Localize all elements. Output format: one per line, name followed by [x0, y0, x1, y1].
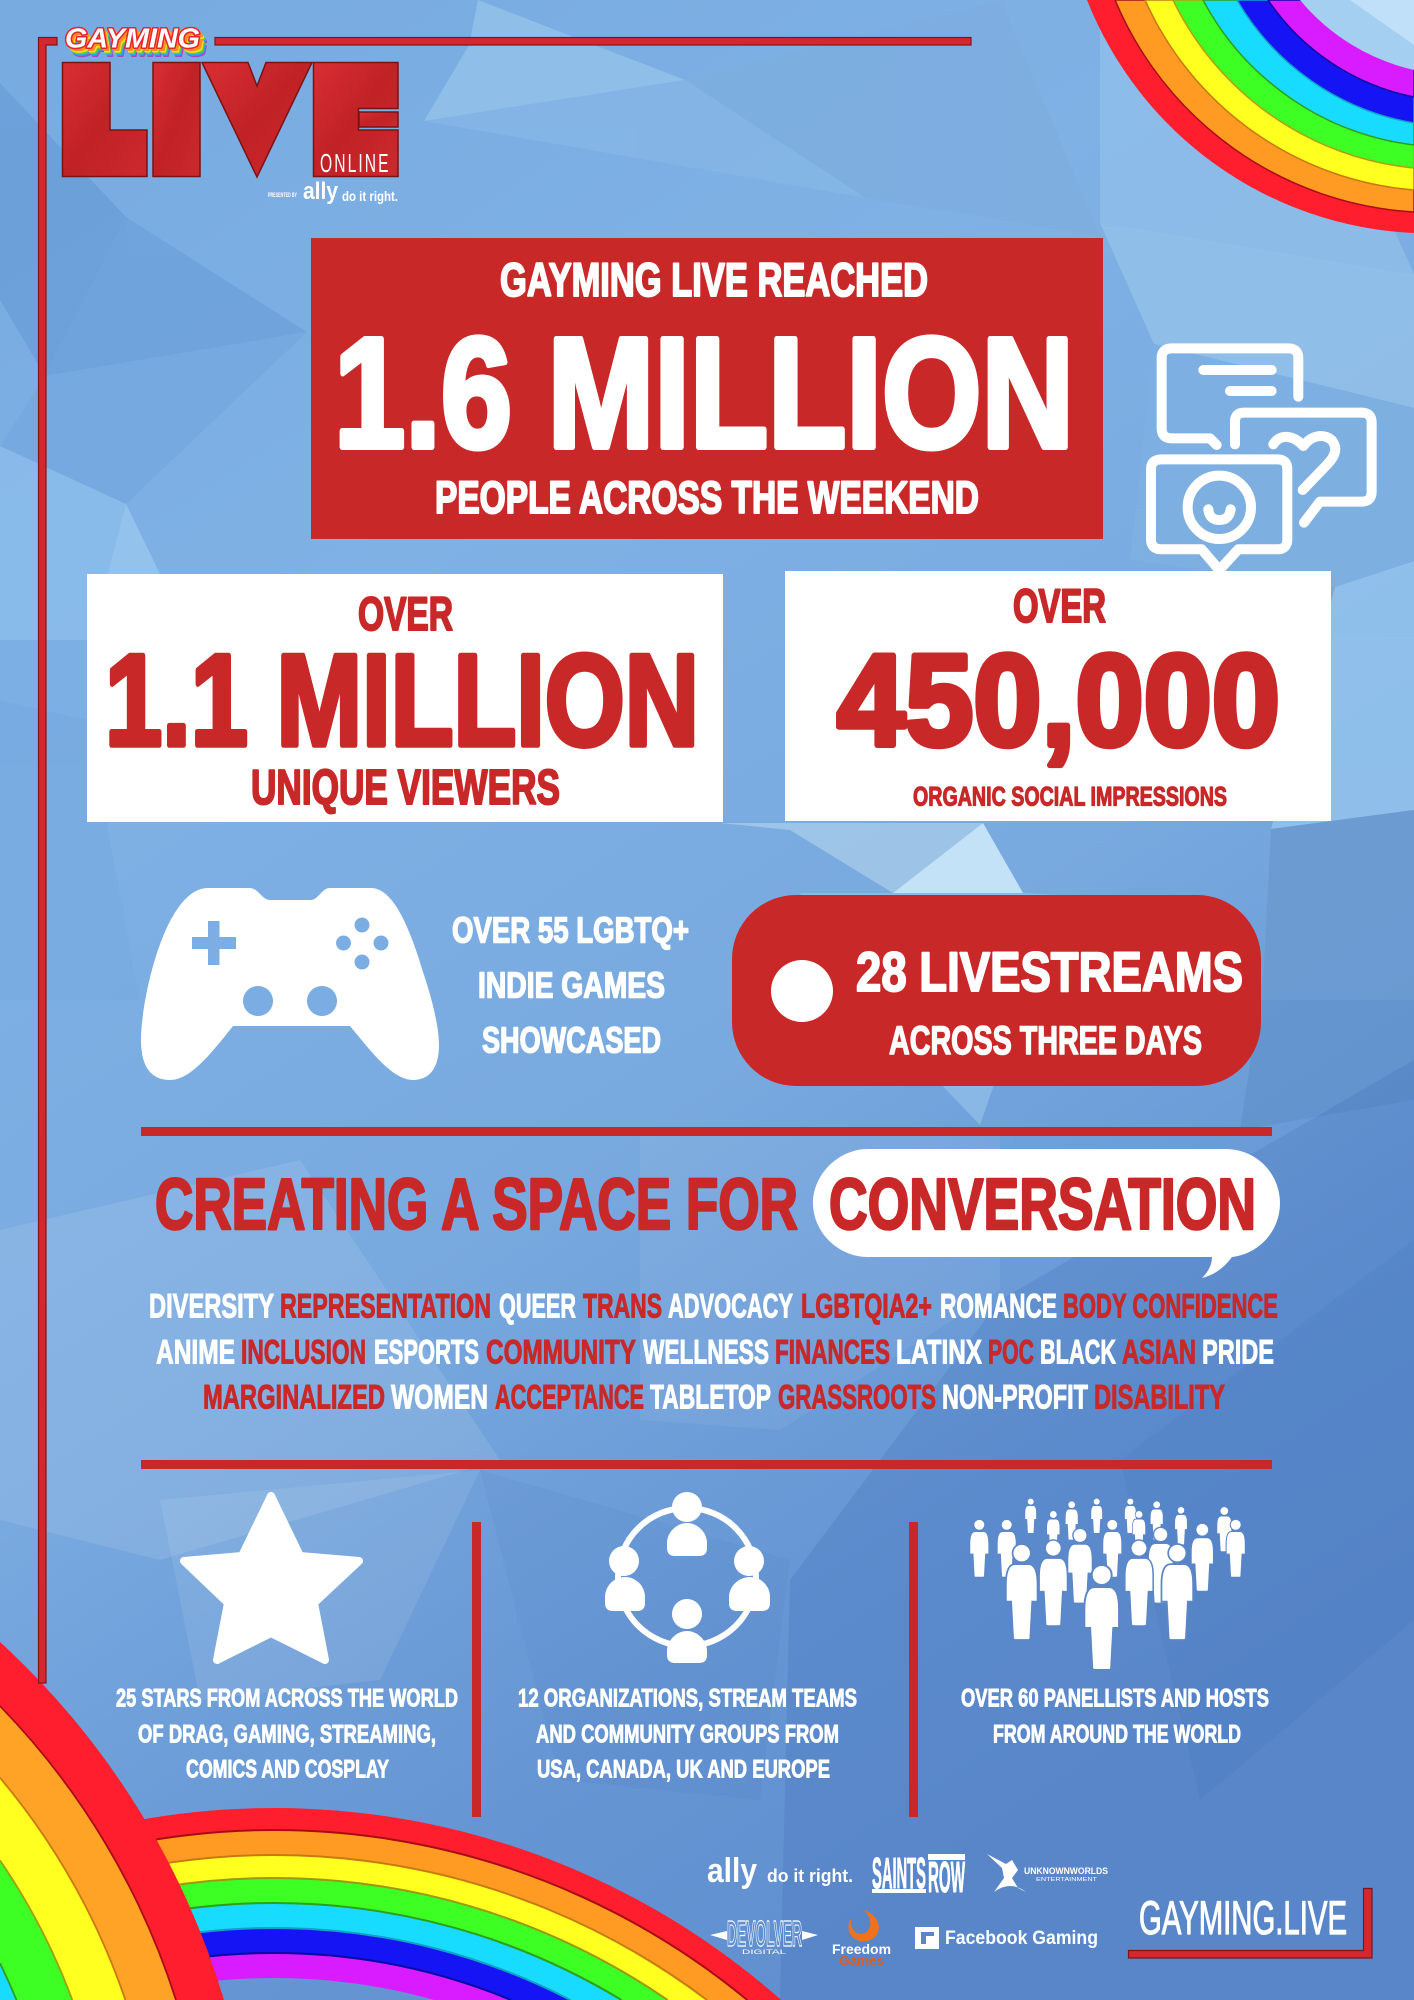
- presented by ally: do it right.: [342, 188, 398, 204]
- column: panellists: FROM AROUND THE WORLD: [993, 1720, 1241, 1748]
- panel: unique viewers: OVER: [358, 587, 453, 640]
- logo wordmark: rainbow Gayming: GAYMING: [65, 22, 200, 54]
- icon: chat bubbles: [1151, 348, 1372, 570]
- column: stars: [116, 1496, 458, 1784]
- keyword cloud: ADVOCACY: [668, 1288, 793, 1326]
- keyword cloud: WELLNESS: [643, 1334, 769, 1372]
- icon: game controller: [141, 888, 439, 1080]
- logo: Freedom Games: [832, 1910, 891, 1968]
- keyword cloud: MARGINALIZED: [203, 1378, 385, 1416]
- text: indie games showcased: SHOWCASED: [482, 1020, 661, 1060]
- column: panellists: [961, 1498, 1269, 1748]
- keyword cloud: TRANS: [583, 1288, 662, 1326]
- logo wordmark: rainbow Gayming: GAYMING: [71, 31, 207, 62]
- keyword cloud: PRIDE: [1202, 1334, 1274, 1372]
- keyword cloud: COMMUNITY: [486, 1334, 636, 1372]
- keyword cloud: WOMEN: [391, 1378, 488, 1416]
- column: stars: OF DRAG, GAMING, STREAMING,: [138, 1720, 436, 1748]
- column: organizations: AND COMMUNITY GROUPS FROM: [536, 1720, 839, 1748]
- panel: unique viewers: UNIQUE VIEWERS: [251, 761, 560, 815]
- frame: bottom right bracket: [1128, 1888, 1372, 1958]
- text: indie games showcased: [452, 910, 689, 1060]
- sub line: PEOPLE ACROSS THE WEEKEND: [435, 472, 979, 523]
- logo wordmark: rainbow Gayming: GAYMING: [70, 30, 206, 60]
- rainbow: bottom arc: [0, 1808, 781, 2000]
- column: stars: COMICS AND COSPLAY: [186, 1756, 389, 1784]
- logo: Devolver Digital: [710, 1913, 818, 1956]
- panel: social impressions: ORGANIC SOCIAL IMPRESSIONS: [913, 782, 1227, 812]
- keyword cloud: DISABILITY: [1094, 1378, 1225, 1416]
- logo: Unknown Worlds: [987, 1854, 1108, 1892]
- logo: Freedom Games: Freedom: [832, 1941, 891, 1957]
- keyword cloud: TABLETOP: [650, 1378, 771, 1416]
- keyword cloud: ROMANCE: [940, 1288, 1057, 1326]
- column: organizations: [518, 1492, 857, 1784]
- panel: unique viewers: 1.1 MILLION: [105, 627, 699, 773]
- logo: Unknown Worlds: ENTERTAINMENT: [1036, 1877, 1097, 1883]
- keyword cloud: REPRESENTATION: [280, 1288, 491, 1326]
- sponsor logos: DEVOLVER: [727, 1913, 802, 1954]
- icon: star: [184, 1496, 359, 1660]
- keyword cloud: NON-PROFIT: [942, 1378, 1088, 1416]
- logo: Unknown Worlds: UNKNOWNWORLDS: [1024, 1866, 1108, 1876]
- presented by ally: [268, 178, 398, 205]
- logo: Freedom Games: Games: [839, 1953, 884, 1968]
- logo: Saints Row: SAINTS: [872, 1849, 926, 1898]
- keyword cloud: ANIME: [156, 1334, 235, 1372]
- panel: 1.6 million headline: [311, 238, 1103, 539]
- keyword cloud: GRASSROOTS: [778, 1378, 936, 1416]
- keyword cloud: ESPORTS: [374, 1334, 479, 1372]
- speech bubble: conversation: CONVERSATION: [829, 1165, 1256, 1245]
- rainbow: top right: [1087, 0, 1414, 233]
- panel: livestreams pill: [732, 895, 1261, 1086]
- logo letters: LIVE: [62, 62, 398, 177]
- logo: ally: ally: [707, 1852, 757, 1890]
- keyword cloud: BLACK: [1040, 1334, 1116, 1372]
- column: panellists: OVER 60 PANELLISTS AND HOSTS: [961, 1684, 1269, 1712]
- presented by ally: PRESENTED BY: [268, 193, 297, 199]
- keyword cloud: POC: [988, 1334, 1034, 1372]
- logo: Gayming Live Online: [62, 22, 398, 205]
- icon: record dot: [771, 960, 833, 1022]
- keyword cloud: LATINX: [896, 1334, 982, 1372]
- rainbow: bottom left: [0, 1642, 224, 2000]
- logo: Devolver Digital: DIGITAL: [742, 1950, 787, 1956]
- keyword cloud: LGBTQIA2+: [801, 1288, 932, 1326]
- logo: ally: [707, 1852, 853, 1890]
- text: indie games showcased: INDIE GAMES: [478, 964, 665, 1006]
- panel: livestreams pill: ACROSS THREE DAYS: [889, 1019, 1202, 1063]
- panel: social impressions: OVER: [1013, 579, 1106, 632]
- keyword cloud: ACCEPTANCE: [495, 1378, 644, 1416]
- keyword cloud: QUEER: [499, 1288, 576, 1326]
- keyword cloud: FINANCES: [775, 1334, 890, 1372]
- keyword cloud: BODY CONFIDENCE: [1063, 1288, 1278, 1326]
- column: organizations: 12 ORGANIZATIONS, STREAM TEAMS: [518, 1684, 857, 1712]
- icon: crowd of people: [970, 1498, 1245, 1670]
- logo: Facebook Gaming: Facebook Gaming: [945, 1928, 1098, 1949]
- keyword cloud: INCLUSION: [241, 1334, 366, 1372]
- logo: Saints Row: [872, 1849, 965, 1902]
- column: stars: 25 STARS FROM ACROSS THE WORLD: [116, 1684, 458, 1712]
- column: organizations: USA, CANADA, UK AND EUROPE: [537, 1756, 830, 1784]
- heading: creating a space: CREATING A SPACE FOR: [155, 1165, 798, 1245]
- frame: top and left red bar: [38, 38, 971, 1683]
- text: indie games showcased: OVER 55 LGBTQ+: [452, 910, 689, 950]
- logo word: Online: ONLINE: [320, 149, 391, 178]
- speech bubble: conversation: [813, 1149, 1280, 1278]
- sponsor logos: ROW: [928, 1853, 965, 1902]
- logo: ally: do it right.: [767, 1866, 853, 1886]
- logo wordmark: rainbow Gayming: GAYMING: [68, 26, 204, 58]
- keyword cloud: DIVERSITY: [149, 1288, 274, 1326]
- presented by ally: ally: [303, 178, 339, 205]
- sponsor logos: [707, 1849, 1108, 1968]
- panel: social impressions: 450,000: [837, 627, 1280, 773]
- big number: 1.6 MILLION: [334, 306, 1074, 481]
- panel: livestreams pill: 28 LIVESTREAMS: [856, 940, 1243, 1003]
- heading line: GAYMING LIVE REACHED: [500, 253, 928, 306]
- panel: social impressions: [785, 571, 1331, 821]
- logo wordmark: rainbow Gayming: GAYMING: [67, 25, 203, 56]
- keyword cloud: ASIAN: [1122, 1334, 1196, 1372]
- keyword cloud: [149, 1288, 1278, 1416]
- icon: circle of people: [605, 1492, 770, 1663]
- panel: unique viewers: [87, 574, 723, 822]
- logo wordmark: rainbow Gayming: GAYMING: [69, 28, 205, 59]
